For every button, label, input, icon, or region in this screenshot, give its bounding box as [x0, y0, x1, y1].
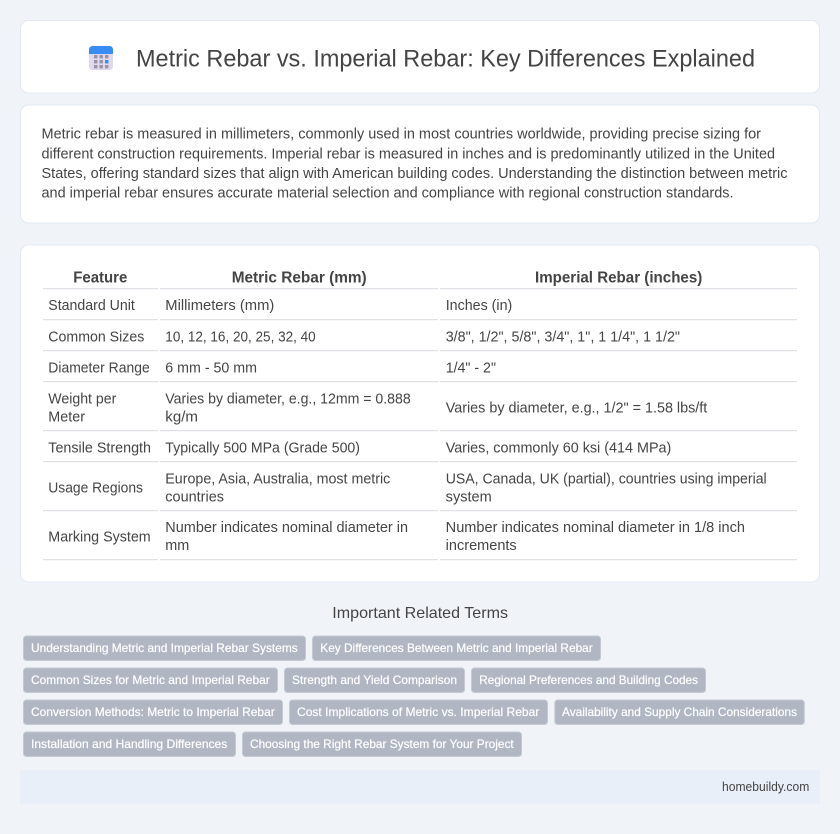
table header row: Imperial Rebar (inches) [535, 270, 702, 287]
tag: Understanding Metric and Imperial Rebar Systems [31, 641, 298, 655]
tag [24, 636, 306, 660]
tag: Availability and Supply Chain Considerations [562, 705, 797, 719]
row: standard unit [43, 298, 797, 320]
row: usage regions: system [446, 489, 492, 505]
tag: Cost Implications of Metric vs. Imperial Rebar [297, 705, 539, 719]
heading: important related terms: Important Related Terms [332, 605, 508, 622]
row: weight per meter: Varies by diameter, e.g., 1/2" = 1.58 lbs/ft [446, 400, 707, 416]
title: Metric Rebar vs. Imperial Rebar: Key Differences Explained [136, 46, 755, 72]
row: tensile strength: Typically 500 MPa (Grade 500) [165, 440, 360, 456]
row: marking system: mm [165, 538, 189, 554]
table header row: Metric Rebar (mm) [232, 270, 367, 287]
tag: Strength and Yield Comparison [292, 673, 457, 687]
row: usage regions: USA, Canada, UK (partial), countries using imperial [446, 471, 767, 487]
row: diameter range [43, 360, 797, 382]
intro paragraph: States, offering standard sizes that align with American building codes. Understanding the distinction between metric [42, 166, 788, 182]
row: standard unit: Standard Unit [48, 298, 135, 314]
tag [24, 732, 236, 756]
panel: related term tags [24, 636, 804, 756]
panel: header [20, 20, 820, 93]
row: marking system: Marking System [48, 529, 151, 545]
row: marking system: Number indicates nominal diameter in 1/8 inch [446, 520, 745, 536]
panel: intro text [20, 105, 820, 223]
intro paragraph [42, 127, 788, 202]
tag: Conversion Methods: Metric to Imperial Rebar [31, 705, 275, 719]
row: usage regions [43, 471, 797, 511]
row: usage regions: Usage Regions [48, 480, 143, 496]
panel: comparison table [20, 245, 820, 582]
row: weight per meter [43, 391, 797, 431]
row: diameter range: 1/4" - 2" [446, 360, 496, 376]
row: marking system: increments [446, 538, 517, 554]
row: weight per meter: Meter [48, 409, 85, 425]
tag: Regional Preferences and Building Codes [479, 673, 698, 687]
tag [242, 732, 522, 756]
row: usage regions: Europe, Asia, Australia, most metric [165, 471, 390, 487]
table header row: Feature [73, 270, 127, 287]
tag: Common Sizes for Metric and Imperial Rebar [31, 673, 270, 687]
tag [555, 700, 804, 724]
row: marking system [43, 520, 797, 560]
row: marking system: Number indicates nominal diameter in [165, 520, 408, 536]
row: common sizes: Common Sizes [48, 329, 144, 345]
row: common sizes: 10, 12, 16, 20, 25, 32, 40 [165, 329, 316, 345]
row: tensile strength: Tensile Strength [48, 440, 151, 456]
row: diameter range: Diameter Range [48, 360, 150, 376]
intro paragraph: different construction requirements. Imperial rebar is measured in inches and is predominantly utilized in the United [42, 147, 775, 163]
tag [284, 668, 464, 692]
tag [472, 668, 706, 692]
tag: Key Differences Between Metric and Imperial Rebar [320, 641, 593, 655]
tag [312, 636, 600, 660]
row: standard unit: Inches (in) [446, 298, 512, 314]
tag [24, 700, 282, 724]
row: usage regions: countries [165, 489, 224, 505]
footer [20, 770, 820, 804]
row: weight per meter: Weight per [48, 391, 117, 407]
tag [24, 668, 278, 692]
tag [290, 700, 548, 724]
row: tensile strength: Varies, commonly 60 ksi (414 MPa) [446, 440, 671, 456]
row: standard unit: Millimeters (mm) [165, 298, 274, 314]
table header row [43, 270, 797, 289]
tag: Choosing the Right Rebar System for Your Project [250, 737, 514, 751]
icon: calendar grid [89, 46, 113, 70]
intro paragraph: and imperial rebar ensures accurate material selection and compliance with regional construction standards. [42, 186, 734, 202]
row: common sizes [43, 329, 797, 351]
row: weight per meter: kg/m [165, 409, 198, 425]
row: tensile strength [43, 440, 797, 462]
tag: Installation and Handling Differences [31, 737, 227, 751]
row: weight per meter: Varies by diameter, e.g., 12mm = 0.888 [165, 391, 411, 407]
intro paragraph: Metric rebar is measured in millimeters, commonly used in most countries worldwide, providing precise sizing for [42, 127, 761, 143]
row: common sizes: 3/8", 1/2", 5/8", 3/4", 1", 1 1/4", 1 1/2" [446, 329, 680, 345]
row: diameter range: 6 mm - 50 mm [165, 360, 257, 376]
footer site name: homebuildy.com [722, 779, 809, 794]
